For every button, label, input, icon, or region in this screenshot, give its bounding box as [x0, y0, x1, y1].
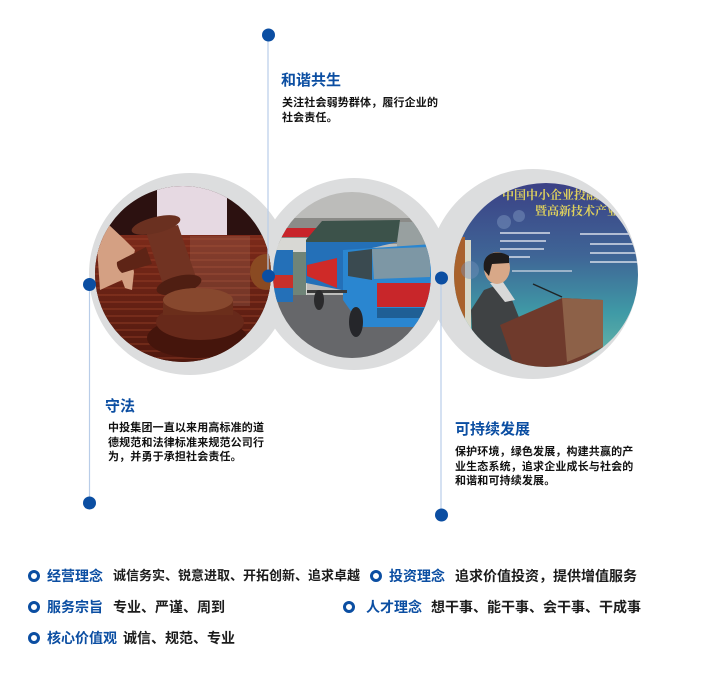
dot: harmony top: [262, 28, 275, 42]
item: service tenet: [28, 599, 225, 615]
photo: relief trucks: [273, 192, 431, 358]
photo: conference speaker: [450, 180, 644, 370]
text: law: [108, 422, 264, 463]
values list: [28, 568, 641, 646]
text: sustainable development: 和谐和可持续发展。: [455, 475, 555, 487]
item: business philosophy: 诚信务实、锐意进取、开拓创新、追求卓越: [113, 568, 360, 583]
grey ring backgrounds: [89, 169, 638, 379]
item: core values: [28, 630, 235, 646]
connector line: law: [88, 284, 90, 503]
text: sustainable development: 业生态系统，追求企业成长与社会的: [455, 460, 633, 472]
text: harmony: 社会责任。: [282, 112, 338, 124]
photo: judge gavel: [95, 186, 271, 362]
item: talent philosophy: 人才理念: [366, 599, 422, 615]
connector line: sustainability: [440, 278, 442, 515]
heading: law: 守法: [105, 398, 135, 415]
photo: conference speaker: 中国中小企业投融资: [502, 187, 612, 202]
item: investment philosophy: [370, 568, 637, 584]
item: core values: 核心价值观: [47, 630, 117, 646]
item: service tenet: 专业、严谨、周到: [113, 599, 225, 615]
dot: law bottom: [83, 496, 96, 510]
dot: law top: [83, 278, 96, 291]
dot: sustainability bottom: [435, 508, 448, 522]
text: harmony: 关注社会弱势群体，履行企业的: [282, 97, 438, 109]
connector line: harmony: [267, 35, 269, 276]
item: core values: 诚信、规范、专业: [123, 630, 235, 646]
dot: harmony bottom: [262, 270, 275, 282]
item: talent philosophy: 想干事、能干事、会干事、干成事: [431, 599, 641, 615]
dot: sustainability top: [435, 272, 448, 284]
text: sustainable development: [455, 446, 633, 487]
heading: sustainable development: 可持续发展: [455, 421, 530, 438]
circular photo group: [83, 28, 638, 522]
item: investment philosophy: 投资理念: [389, 568, 445, 584]
item: investment philosophy: 追求价值投资，提供增值服务: [455, 568, 637, 584]
item: service tenet: 服务宗旨: [47, 599, 103, 615]
photo: conference speaker: 暨高新技术产业金融: [535, 203, 644, 218]
text: harmony: [282, 96, 438, 124]
item: business philosophy: 经营理念: [47, 568, 103, 584]
text: sustainable development: 保护环境，绿色发展，构建共赢的产: [455, 446, 633, 458]
text: law: 中投集团一直以来用高标准的道: [108, 422, 264, 434]
item: business philosophy: [28, 568, 360, 584]
heading: harmony: 和谐共生: [281, 72, 341, 89]
text: law: 为，并勇于承担社会责任。: [108, 451, 242, 463]
text: law: 德规范和法律标准来规范公司行: [108, 436, 264, 448]
